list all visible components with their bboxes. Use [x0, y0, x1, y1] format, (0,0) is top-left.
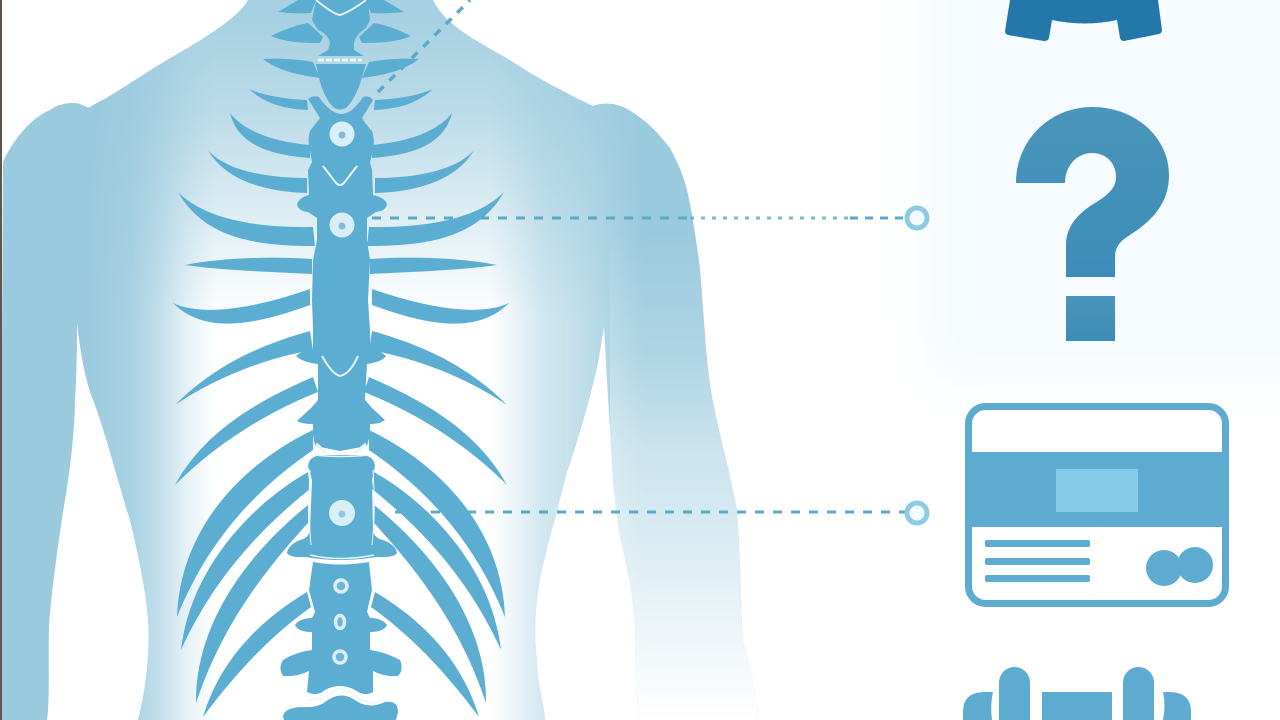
right arm fade [610, 282, 758, 720]
callout node upper [907, 208, 927, 228]
lumbar column [280, 562, 402, 694]
icon: dumbbell hands [963, 663, 1191, 720]
left ribs [173, 0, 323, 717]
spine highlights [309, 0, 375, 703]
sacrum [283, 695, 398, 720]
callout node lower [907, 503, 927, 523]
marked vertebra [287, 455, 397, 560]
card logo circles [1146, 547, 1213, 586]
thoracic column [296, 96, 387, 451]
icon: credit card [965, 406, 1229, 604]
upper vertebra [312, 0, 370, 56]
card stripe [965, 452, 1229, 527]
icon: question mark [1016, 107, 1169, 341]
card text lines [985, 540, 1090, 582]
icon: vertebra top [1005, 0, 1162, 41]
dashed leader lines [372, 0, 905, 512]
right ribs [359, 0, 509, 717]
spine and ribs [173, 0, 509, 720]
card chip [1056, 469, 1138, 512]
torso highlight [80, 0, 645, 720]
body silhouette [0, 0, 780, 720]
vertebra rings [329, 122, 355, 663]
neck vertebra [316, 64, 366, 110]
left edge line [0, 0, 2, 720]
